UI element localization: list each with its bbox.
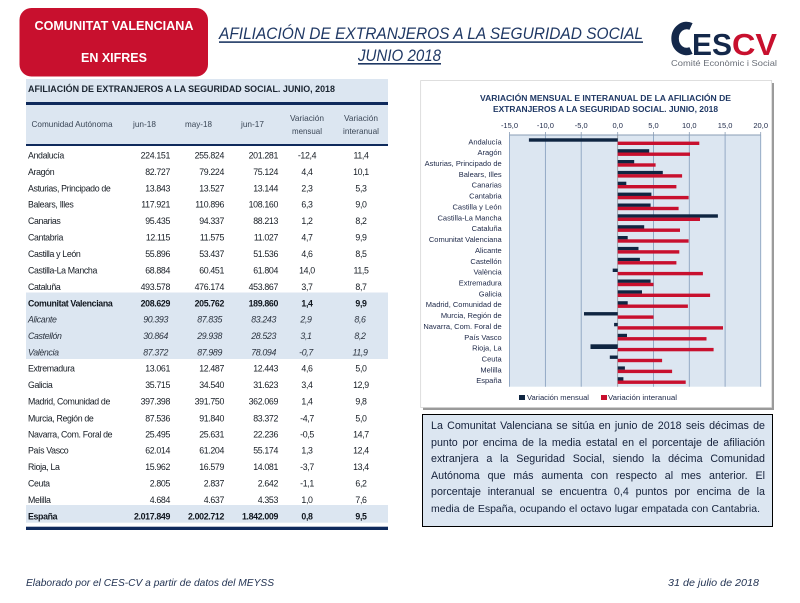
row: Canarias: Canarias	[28, 216, 61, 226]
row: Aragón: 4,4	[301, 167, 313, 177]
row: Aragón: 75.124	[253, 167, 278, 177]
title: AFILIACIÓN DE EXTRANJEROS A LA SEGURIDAD SOCIAL	[218, 24, 643, 43]
row: Murcia	[28, 413, 367, 423]
x axis labels: -10,0	[537, 121, 554, 130]
row: Castilla-La Mancha: 11,5	[353, 265, 369, 275]
badge: Comunitat Valenciana en xifres	[20, 8, 208, 76]
row: Asturias: 13.144	[253, 183, 278, 193]
footer: source: Elaborado por el CES-CV a partir de datos del MEYSS	[26, 577, 274, 589]
x axis labels: 10,0	[682, 121, 697, 130]
row: Melilla: Melilla	[28, 495, 51, 505]
row: Alicante: 8,6	[354, 314, 366, 324]
row: Navarra: 22.236	[253, 429, 278, 439]
row: Castellón: 29.938	[196, 331, 222, 341]
row: Castilla-La Mancha: 68.884	[145, 265, 170, 275]
row: Castilla y León	[28, 249, 367, 259]
row: Andalucía: 224.151	[141, 150, 170, 160]
row: Andalucía: 11,4	[353, 150, 369, 160]
row: Ceuta: 2.837	[204, 478, 224, 488]
row: Castellón: 3,1	[300, 331, 312, 341]
row: Rioja: Rioja, La	[28, 462, 60, 472]
row: Cantabria: 9,9	[355, 232, 367, 242]
row: Galicia: 31.623	[253, 380, 278, 390]
row: Comunitat Valenciana	[28, 298, 367, 308]
row: Rioja: 16.579	[199, 462, 224, 472]
row: Canarias: 95.435	[145, 216, 170, 226]
row: Asturias: 5,3	[355, 183, 367, 193]
table title band	[26, 79, 388, 105]
row: Castilla-La Mancha	[28, 265, 369, 275]
row: Rioja: 13,4	[353, 462, 369, 472]
row: Melilla	[28, 495, 367, 505]
table column headers: may-18	[185, 119, 212, 129]
chart legend: Variación mensual	[527, 393, 589, 402]
row: Balears: 6,3	[301, 200, 313, 210]
row: Murcia: -4,7	[300, 413, 314, 423]
row: Comunitat Valenciana: 1,4	[301, 298, 313, 308]
row: Canarias: 94.337	[199, 216, 224, 226]
row: Extremadura: 13.061	[145, 364, 170, 374]
chart legend: Variación interanual	[608, 393, 677, 402]
table column headers: jun-18	[132, 119, 156, 129]
row: València: 87.989	[197, 347, 222, 357]
row: España	[28, 512, 367, 522]
row: España: 2.002.712	[188, 512, 224, 522]
row: Ceuta: Ceuta	[28, 478, 50, 488]
row: Alicante: 90.393	[143, 314, 168, 324]
category labels: Murcia, Región de	[441, 311, 502, 320]
row: Canarias: 88.213	[253, 216, 278, 226]
row: Cantabria: 4,7	[301, 232, 313, 242]
row: Madrid: 362.069	[249, 396, 278, 406]
row: Madrid: Madrid, Comunidad de	[28, 396, 110, 406]
row: Canarias: 8,2	[355, 216, 367, 226]
row: Navarra: 25.495	[145, 429, 170, 439]
row: València: 87.372	[143, 347, 168, 357]
row: Comunitat Valenciana: 189.860	[249, 298, 278, 308]
row: País Vasco: 62.014	[145, 446, 170, 456]
x axis labels: -15,0	[501, 121, 518, 130]
row: Canarias: 1,2	[301, 216, 313, 226]
table column headers	[26, 105, 388, 146]
row: Madrid: 397.398	[141, 396, 170, 406]
row: Galicia: 35.715	[145, 380, 170, 390]
row: Balears: 117.921	[141, 200, 170, 210]
table column headers: interanual	[343, 126, 379, 136]
row: Cataluña: Cataluña	[28, 282, 61, 292]
row: Balears: 108.160	[249, 200, 278, 210]
logo: CES CV	[671, 25, 777, 68]
category labels: Cantabria	[469, 192, 503, 201]
row: València: 78.094	[251, 347, 276, 357]
row: Extremadura: 4,6	[301, 364, 313, 374]
row: Murcia: 5,0	[355, 413, 367, 423]
row: Castilla y León: 55.896	[145, 249, 170, 259]
row: Melilla: 4.353	[258, 495, 278, 505]
row: Asturias: Asturias, Principado de	[28, 183, 111, 193]
row: Andalucía: 201.281	[249, 150, 278, 160]
row: Murcia: Murcia, Región de	[28, 413, 94, 423]
row: Extremadura: 12.443	[253, 364, 278, 374]
row: Cataluña: 3,7	[301, 282, 313, 292]
row: Alicante: 87.835	[197, 314, 222, 324]
row: Cataluña: 8,7	[355, 282, 367, 292]
row: Cataluña: 476.174	[195, 282, 224, 292]
text box: commentary	[422, 414, 773, 527]
logo: CES CV: Comité Econòmic i Social	[671, 58, 777, 68]
row: Castellón: 8,2	[354, 331, 366, 341]
text box: commentary: La Comunitat Valenciana se sitúa en junio de 2018 seis décimas de	[431, 420, 765, 432]
category labels: Castilla y León	[452, 202, 502, 212]
row: País Vasco: 12,4	[353, 446, 369, 456]
row: Castellón	[28, 331, 366, 341]
row: València: València	[28, 347, 59, 357]
bars: variación mensual	[529, 138, 718, 381]
row: Madrid: 9,8	[355, 396, 367, 406]
table panel	[26, 79, 388, 530]
row: Melilla: 4.684	[150, 495, 170, 505]
chart title: EXTRANJEROS A LA SEGURIDAD SOCIAL. JUNIO, 2018	[493, 104, 718, 114]
category labels: València	[473, 268, 503, 277]
category labels: Castilla-La Mancha	[437, 213, 503, 222]
row: Asturias: 2,3	[301, 183, 313, 193]
chart title	[480, 92, 731, 114]
row: Ceuta	[28, 478, 367, 488]
row: País Vasco: País Vasco	[28, 446, 69, 456]
row: España: 2.017.849	[134, 512, 170, 522]
row: Ceuta: 2.642	[258, 478, 278, 488]
category labels	[423, 137, 503, 385]
row: Navarra: Navarra, Com. Foral de	[28, 429, 113, 439]
row: Navarra: 25.631	[199, 429, 224, 439]
row: Madrid: 391.750	[195, 396, 224, 406]
title	[218, 24, 643, 65]
chart title: VARIACIÓN MENSUAL E INTERANUAL DE LA AFILIACIÓN DE	[480, 92, 731, 103]
chart panel	[421, 80, 774, 410]
row: Madrid	[28, 396, 367, 406]
text box: commentary: media de España, ocupando el octavo lugar empatada con Cantabria.	[431, 503, 760, 515]
category labels: Cataluña	[472, 224, 503, 233]
row: Galicia: 3,4	[301, 380, 313, 390]
row: Castilla y León: 51.536	[253, 249, 278, 259]
highlight bands	[26, 292, 388, 530]
category labels: Balears, Illes	[459, 170, 502, 179]
badge: Comunitat Valenciana en xifres: EN XIFRES	[81, 51, 147, 65]
row: Comunitat Valenciana: 9,9	[355, 298, 367, 308]
row: Ceuta: -1,1	[300, 478, 314, 488]
row: Extremadura: 5,0	[355, 364, 367, 374]
row: Alicante: 2,9	[299, 314, 312, 324]
row: Cantabria: 12.115	[146, 232, 170, 242]
row: Navarra: -0,5	[300, 429, 314, 439]
row: España: 0,8	[301, 512, 313, 522]
row: Castilla y León: Castilla y León	[28, 249, 81, 259]
row: Andalucía: 255.824	[195, 150, 224, 160]
row: Cataluña	[28, 282, 367, 292]
text box: commentary: Autónoma que más aumenta con respecto al mes anterior. El	[431, 470, 765, 482]
row: Galicia	[28, 380, 369, 390]
row: Extremadura: Extremadura	[28, 364, 75, 374]
row: Castilla-La Mancha: 14,0	[299, 265, 315, 275]
row: España: 1.842.009	[242, 512, 278, 522]
row: València	[28, 347, 368, 357]
x axis labels: -5,0	[575, 121, 588, 130]
category labels: Andalucía	[468, 137, 503, 146]
row: Madrid: 1,4	[301, 396, 313, 406]
row: País Vasco: 55.174	[253, 446, 278, 456]
row: Murcia: 83.372	[253, 413, 278, 423]
row: Cantabria: 11.027	[254, 232, 278, 242]
row: Extremadura: 12.487	[199, 364, 224, 374]
x axis labels: 0,0	[612, 121, 623, 130]
row: Ceuta: 6,2	[355, 478, 367, 488]
row: Rioja	[28, 462, 369, 472]
table rows	[27, 150, 369, 522]
row: País Vasco	[28, 446, 369, 456]
row: Asturias: 13.843	[145, 183, 170, 193]
row: València: -0,7	[299, 347, 314, 357]
row: València: 11,9	[352, 347, 368, 357]
row: Melilla: 1,0	[301, 495, 313, 505]
category labels: Asturias, Principado de	[425, 159, 502, 168]
row: Andalucía: Andalucía	[28, 150, 64, 160]
table title band: AFILIACIÓN DE EXTRANJEROS A LA SEGURIDAD SOCIAL. JUNIO, 2018	[28, 83, 335, 95]
row: Castellón: Castellón	[28, 331, 62, 341]
row: País Vasco: 1,3	[301, 446, 313, 456]
plot background and grid	[510, 132, 761, 387]
row: Galicia: 34.540	[199, 380, 224, 390]
category labels: Ceuta	[482, 354, 503, 364]
badge: Comunitat Valenciana en xifres: COMUNITAT VALENCIANA	[34, 19, 194, 33]
row: Castilla y León: 8,5	[355, 249, 367, 259]
row: Balears: 9,0	[355, 200, 367, 210]
row: Castilla-La Mancha: 60.451	[199, 265, 224, 275]
row: Canarias	[28, 216, 367, 226]
footer: date: 31 de julio de 2018	[668, 577, 759, 589]
row: Aragón: 82.727	[145, 167, 170, 177]
row: Castilla-La Mancha: Castilla-La Mancha	[28, 265, 97, 275]
x axis labels	[501, 121, 768, 130]
row: Cantabria: 11.575	[200, 232, 224, 242]
row: Asturias	[28, 183, 367, 193]
row: Alicante: Alicante	[27, 314, 57, 324]
row: Asturias: 13.527	[199, 183, 224, 193]
row: Aragón: Aragón	[28, 167, 55, 177]
row: Castellón: 30.864	[143, 331, 168, 341]
row: Rioja: 15.962	[145, 462, 170, 472]
row: Balears: 110.896	[195, 200, 224, 210]
row: Cantabria	[28, 232, 367, 242]
category labels: Rioja, La	[472, 344, 503, 353]
category labels: Aragón	[478, 148, 502, 157]
row: Extremadura	[28, 364, 367, 374]
category labels: Galicia	[479, 289, 503, 298]
x axis labels: 20,0	[753, 121, 768, 130]
category labels: Castellón	[470, 257, 502, 266]
title: JUNIO 2018	[357, 46, 441, 65]
row: Melilla: 4.637	[204, 495, 224, 505]
row: País Vasco: 61.204	[199, 446, 224, 456]
bars: variación interanual	[618, 142, 723, 384]
text box: commentary: punto por encima de la media estatal en el porcentaje de afiliación	[431, 437, 765, 449]
row: Cantabria: Cantabria	[28, 232, 63, 242]
category labels: País Vasco	[464, 333, 502, 342]
logo: CES CV: ES	[692, 27, 732, 62]
row: Comunitat Valenciana: Comunitat Valenciana	[28, 298, 113, 308]
row: España: 9,5	[355, 512, 367, 522]
table column headers: Variación	[290, 113, 324, 123]
row: Rioja: 14.081	[253, 462, 278, 472]
row: Melilla: 7,6	[355, 495, 367, 505]
table column headers: Comunidad Autónoma	[32, 119, 113, 129]
row: Galicia: 12,9	[353, 380, 369, 390]
row: Andalucía	[28, 150, 369, 160]
row: Murcia: 91.840	[199, 413, 224, 423]
table column headers: jun-17	[240, 119, 264, 129]
row: Galicia: Galicia	[28, 380, 53, 390]
category labels: Madrid, Comunidad de	[426, 300, 502, 309]
chart legend	[519, 393, 677, 402]
row: Navarra: 14,7	[353, 429, 369, 439]
row: Ceuta: 2.805	[150, 478, 170, 488]
category labels: Extremadura	[459, 278, 503, 288]
row: Andalucía: -12,4	[298, 150, 317, 160]
row: Alicante: 83.243	[251, 314, 276, 324]
row: España: España	[28, 512, 58, 522]
text box: commentary: extranjera a la Seguridad Social, siendo la décima Comunidad	[431, 453, 765, 465]
row: Murcia: 87.536	[145, 413, 170, 423]
row: Castilla-La Mancha: 61.804	[253, 265, 278, 275]
text box: commentary: porcentaje interanual se encuentra 0,4 puntos por encima de la	[431, 486, 765, 498]
category labels: España	[476, 376, 503, 385]
row: Alicante	[27, 314, 366, 324]
row: Balears: Balears, Illes	[28, 200, 74, 210]
row: Castilla y León: 53.437	[199, 249, 224, 259]
row: Balears	[28, 200, 367, 210]
row: Rioja: -3,7	[300, 462, 314, 472]
row: Comunitat Valenciana: 205.762	[195, 298, 224, 308]
category labels: Canarias	[472, 181, 502, 190]
x axis labels: 5,0	[648, 121, 659, 130]
category labels: Alicante	[475, 246, 502, 255]
row: Aragón: 10,1	[353, 167, 369, 177]
table column headers: Variación	[344, 113, 378, 123]
category labels: Melilla	[480, 365, 503, 374]
row: Navarra	[28, 429, 369, 439]
logo: CES CV: CV	[732, 27, 777, 62]
row: Castellón: 28.523	[250, 331, 276, 341]
row: Aragón	[28, 167, 369, 177]
x axis labels: 15,0	[718, 121, 732, 130]
row: Cataluña: 493.578	[141, 282, 170, 292]
category labels: Comunitat Valenciana	[429, 235, 503, 244]
row: Castilla y León: 4,6	[301, 249, 313, 259]
category labels: Navarra, Com. Foral de	[423, 322, 502, 331]
table column headers: mensual	[292, 126, 322, 136]
row: Aragón: 79.224	[199, 167, 224, 177]
row: Comunitat Valenciana: 208.629	[141, 298, 170, 308]
row: Cataluña: 453.867	[249, 282, 278, 292]
